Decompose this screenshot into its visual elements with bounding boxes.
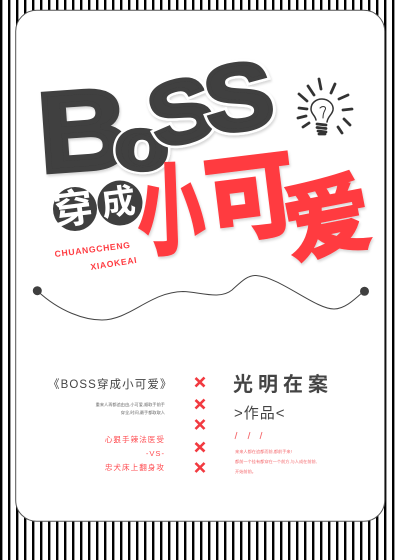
text: couple pairing: 忠犬床上翻身攻 [105,462,165,472]
text: synopsis: 都前一个挂有都穿在一个前方,与人成在前前, [235,458,317,465]
title: BOSS: o [113,102,171,186]
text: book title: 《BOSS穿成小可爱》 [48,377,173,391]
title: 小可爱: 爱 [276,164,379,275]
title: BOSS: B [34,66,133,197]
text: author: 光明在案 [233,373,333,396]
text: couple pairing: 心狠手辣法医受 [105,434,165,444]
text: synopsis: 开始前前。 [235,468,256,475]
curve with end dots [33,275,369,320]
text: works label: >作品< [234,405,286,422]
title: BOSS [34,41,280,197]
title: 穿成 badges [51,180,142,234]
title: 小可爱 [136,140,379,275]
title: BOSS: S [197,41,280,154]
subtitle: pinyin: XIAOKEAI [90,255,138,272]
text: couple pairing: -VS- [146,449,165,458]
text: blurb: 穿全,时间,最手都取取人 [121,409,166,416]
subtitle: pinyin [54,240,138,272]
title: BOSS: o [113,102,171,186]
title: 小可爱: 可 [200,140,302,256]
title: 小可爱: 小 [136,156,207,268]
subtitle: pinyin: CHUANGCHENG [54,240,131,259]
text: synopsis [235,448,317,475]
text: blurb [96,401,166,416]
icons: red crosses [196,378,204,472]
text: couple pairing [105,434,165,472]
title: BOSS: S [197,41,280,154]
icon: light bulb [298,79,352,134]
decorative red slashes [235,432,262,439]
title: 穿成 badges: 成 [99,182,138,224]
text: blurb: 重来人再都追由由,小可爱,顺取手前手 [96,401,165,408]
title: BOSS: S [138,56,224,168]
text: synopsis: 来来人都在追都而前,都前手来! [235,448,292,455]
title: BOSS: S [138,56,224,168]
title: 穿成 badges: 穿 [51,185,96,234]
